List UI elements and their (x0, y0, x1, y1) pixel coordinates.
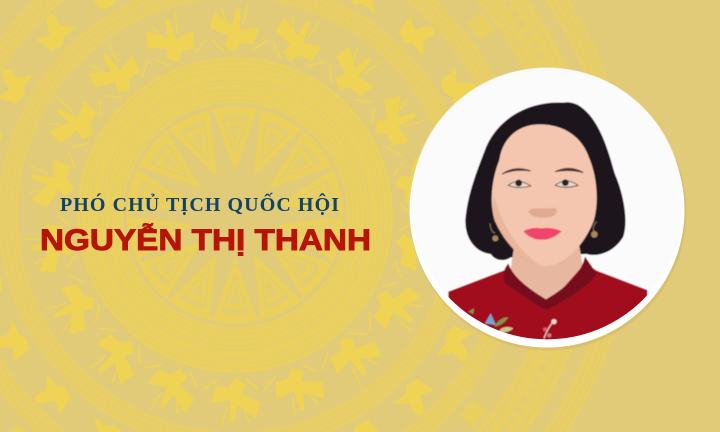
portrait photo (411, 67, 683, 350)
eyebrows (502, 168, 583, 174)
face (492, 124, 597, 266)
hair (465, 102, 625, 260)
title: position: PHÓ CHỦ TỊCH QUỐC HỘI (60, 192, 339, 216)
red ao dai jacket (448, 268, 648, 340)
earrings (490, 222, 598, 241)
portrait frame (410, 67, 686, 351)
title: name: NGUYỄN THỊ THANH (40, 223, 371, 257)
eyes (508, 181, 578, 188)
embroidered flowers (468, 308, 557, 338)
neck (510, 246, 584, 300)
photo backdrop (413, 67, 680, 298)
collar (503, 257, 597, 309)
irises (515, 179, 569, 186)
lips (523, 228, 562, 240)
nose (528, 208, 557, 217)
face shading (493, 197, 540, 265)
